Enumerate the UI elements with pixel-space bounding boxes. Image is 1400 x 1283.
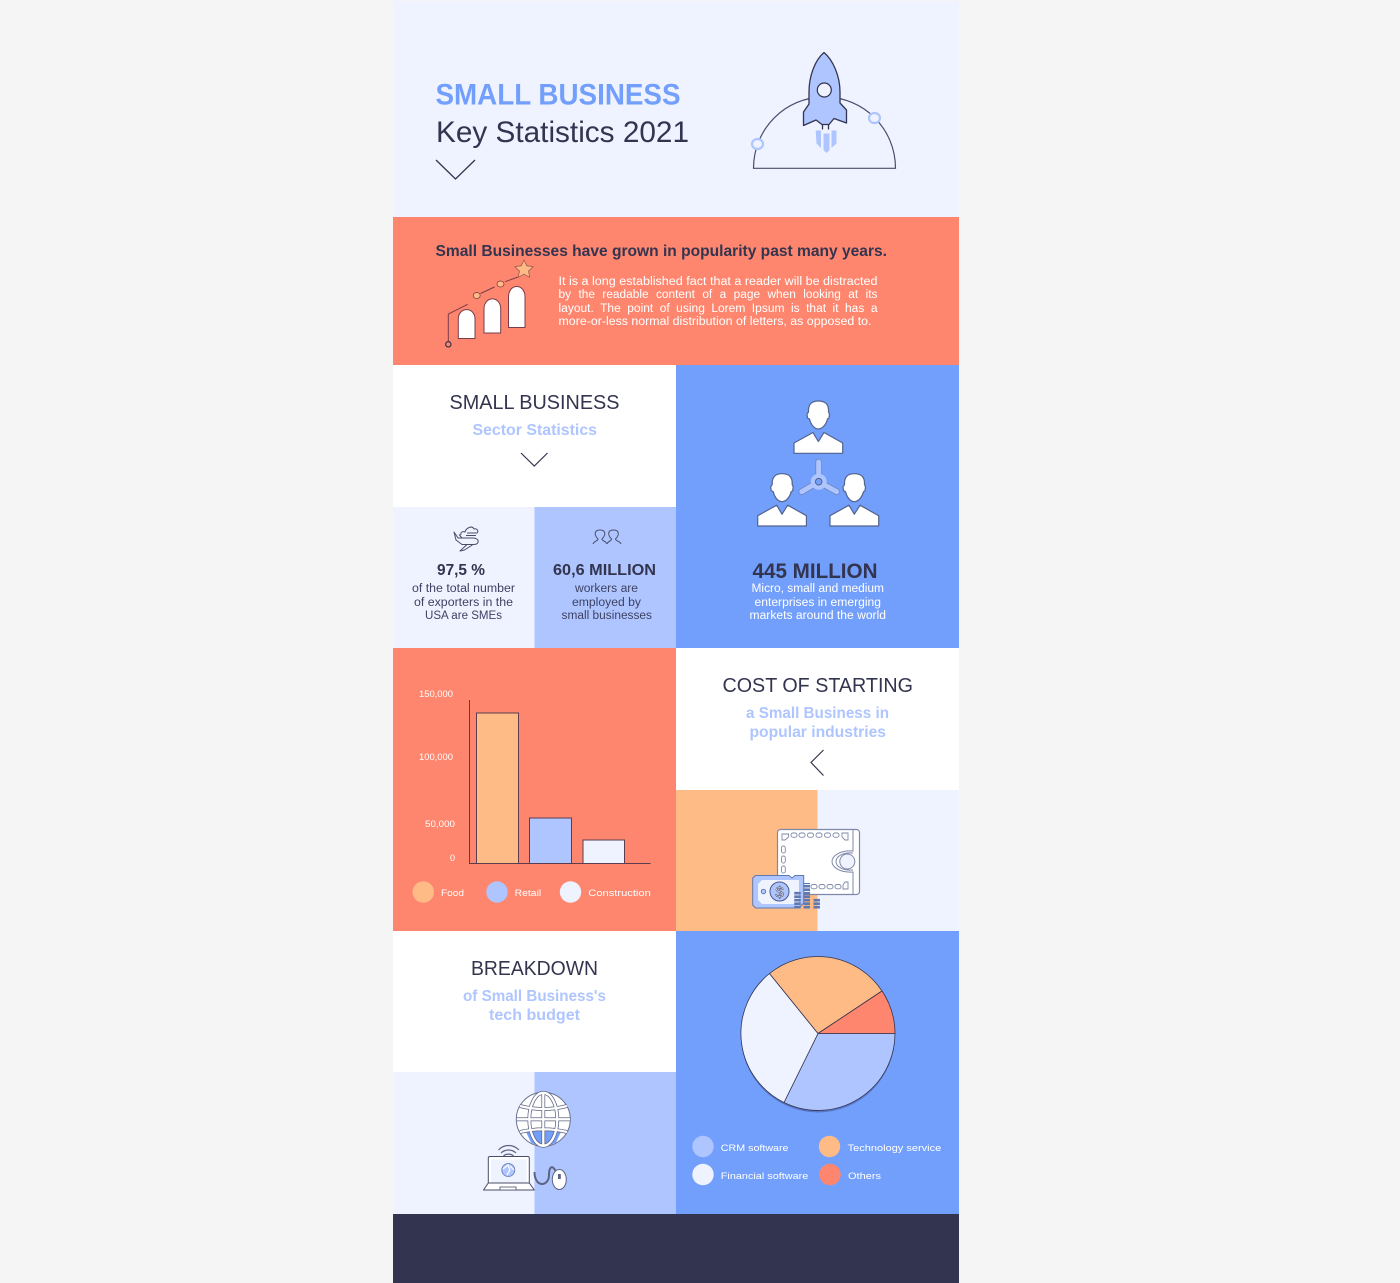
panel: breakdown heading: tech budget — [489, 1007, 581, 1024]
pie legend — [692, 1136, 941, 1185]
pie legend: Others — [848, 1171, 881, 1182]
panel: technology — [393, 1072, 676, 1214]
icon: globe — [516, 1092, 570, 1146]
pie legend: Technology service — [848, 1143, 941, 1154]
panel: intro — [393, 217, 959, 365]
panel: exporters stat: of the total number — [412, 583, 515, 595]
icon: mouse — [534, 1167, 566, 1190]
icon: chevron down — [436, 160, 475, 179]
icon: growth chart with star — [446, 260, 533, 347]
intro paragraph — [558, 276, 878, 328]
panel: enterprises stat: markets around the world — [750, 610, 886, 622]
y axis labels: 0 — [450, 853, 455, 863]
icon: plane with clouds — [454, 527, 478, 551]
panel: pie chart — [676, 931, 959, 1214]
icon: chevron left — [811, 750, 824, 776]
bar: construction — [583, 840, 624, 864]
subtitle: Key Statistics 2021 — [436, 116, 689, 149]
icon: wallet and cash: $ — [775, 884, 784, 901]
icon: laptop with wifi — [484, 1146, 534, 1190]
panel: breakdown heading — [393, 931, 676, 1072]
panel: breakdown heading: BREAKDOWN — [471, 958, 598, 980]
stat: 97,5 %: 97,5 % — [437, 562, 485, 579]
panel: workers stat: employed by — [572, 597, 641, 609]
panel: exporters stat: USA are SMEs — [425, 610, 502, 622]
icon: rocket over dome — [752, 52, 896, 168]
panel: sector statistics heading: Sector Statistics — [472, 422, 597, 439]
panel: enterprises stat: Micro, small and medium — [752, 583, 884, 595]
panel: enterprises stat: enterprises in emerging — [754, 597, 881, 609]
panel: bar chart — [393, 648, 676, 931]
pie legend: Financial software — [721, 1171, 808, 1182]
icon: two people — [593, 530, 621, 544]
pie legend: CRM software — [721, 1143, 788, 1154]
bar: food — [476, 713, 518, 864]
intro paragraph: by the readable content of a page when looking at its — [558, 289, 878, 301]
y axis labels — [419, 689, 455, 863]
chart legend: Retail — [515, 888, 541, 899]
intro heading: Small Businesses have grown in popularity past many years. — [436, 243, 887, 260]
intro paragraph: more-or-less normal distribution of letters, as opposed to. — [558, 316, 872, 328]
panel: workers stat — [534, 507, 676, 648]
panel: workers stat: small businesses — [562, 610, 652, 622]
y axis labels: 100,000 — [419, 752, 453, 762]
panel: cost of starting heading: a Small Business in — [746, 705, 889, 722]
panel: workers stat: workers are — [574, 583, 638, 595]
intro paragraph: layout. The point of using Lorem Ipsum is that it has a — [558, 303, 878, 315]
stat: 445 million: 445 MILLION — [752, 560, 878, 583]
icon: three connected people — [758, 401, 879, 526]
bar: retail — [530, 818, 572, 864]
title: small business: SMALL BUSINESS — [436, 78, 680, 112]
panel: sector statistics heading: SMALL BUSINESS — [450, 392, 620, 414]
panel: cost of starting heading: popular industries — [750, 724, 886, 741]
panel: sector statistics heading — [393, 365, 676, 507]
chart legend: Food — [441, 888, 464, 899]
panel: wallet — [676, 790, 959, 931]
pie shadow — [741, 958, 895, 1112]
axes — [470, 700, 650, 864]
panel: enterprises stat — [676, 365, 959, 648]
panel: breakdown heading: of Small Business's — [463, 988, 606, 1005]
y axis labels: 50,000 — [425, 819, 455, 829]
connector hub — [802, 462, 837, 492]
pie chart — [741, 956, 895, 1110]
person top — [794, 401, 843, 453]
chart legend — [413, 881, 651, 903]
panel: exporters stat: of exporters in the — [414, 597, 513, 609]
panel: header — [393, 1, 959, 217]
chart legend: Construction — [588, 888, 651, 899]
person right — [830, 474, 879, 526]
intro paragraph: It is a long established fact that a reader will be distracted — [558, 276, 878, 288]
panel: cost of starting heading: COST OF STARTING — [722, 675, 913, 697]
icon: chevron down — [521, 453, 548, 466]
y axis labels: 150,000 — [419, 689, 453, 699]
panel: cost of starting heading — [676, 648, 959, 790]
footer band — [393, 1214, 959, 1283]
stat: 60,6 million: 60,6 MILLION — [553, 562, 656, 579]
panel: exporters stat — [393, 507, 534, 648]
person left — [758, 474, 806, 526]
icon: wallet and cash — [753, 830, 860, 908]
